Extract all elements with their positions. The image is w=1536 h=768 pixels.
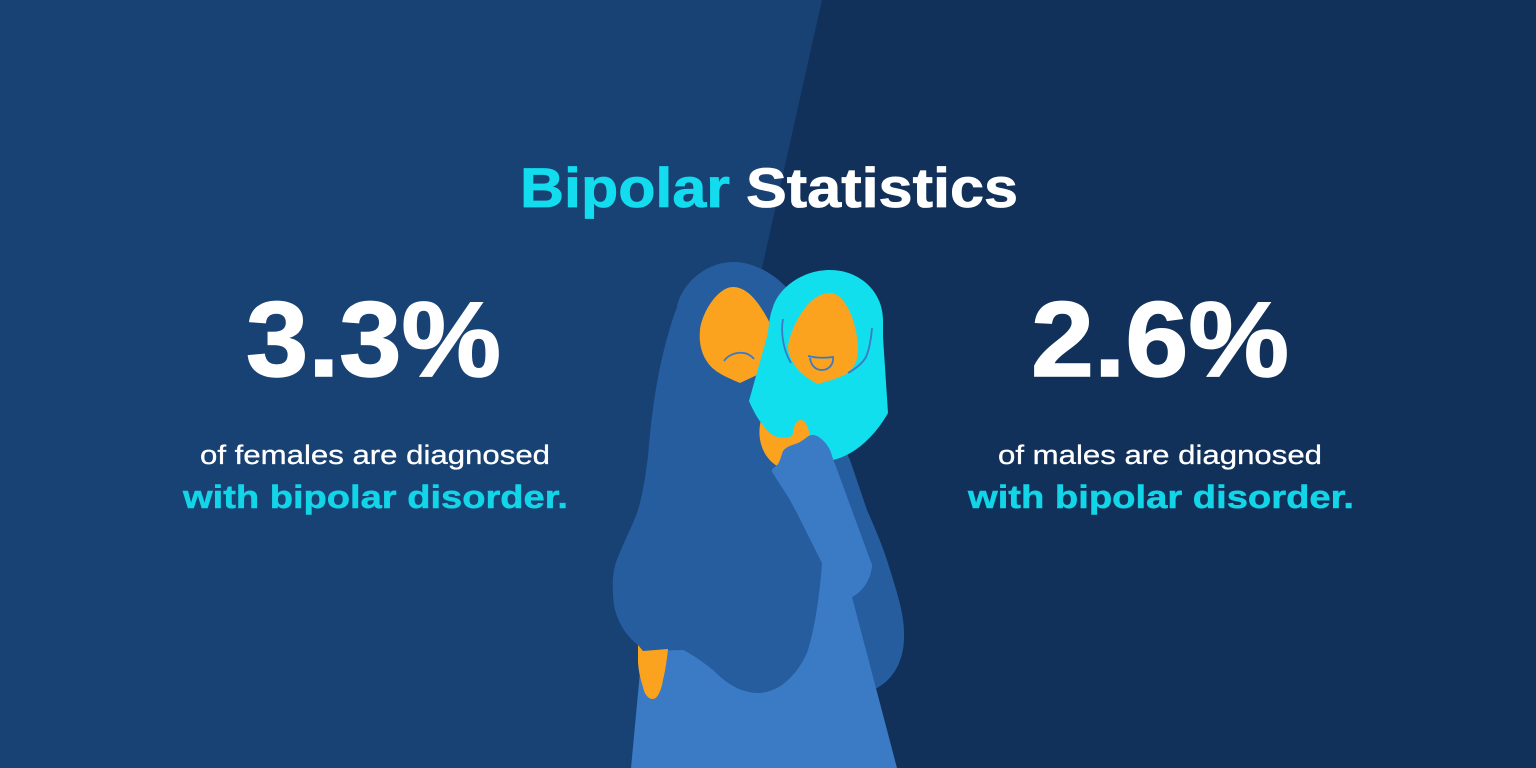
left hair strand xyxy=(782,319,791,363)
right statistic: males xyxy=(967,279,1354,515)
rear scarf xyxy=(700,262,904,690)
highlighted line: with bipolar disorder. xyxy=(182,479,568,515)
background: lighter left panel xyxy=(0,0,822,768)
title: Statistics xyxy=(746,156,1018,219)
dress body xyxy=(631,460,897,768)
left statistic: females xyxy=(182,279,568,515)
fingers xyxy=(777,420,810,450)
illustration: woman with two faces xyxy=(613,262,904,768)
arm xyxy=(772,435,872,597)
right hair strand xyxy=(848,328,872,373)
title xyxy=(520,156,1018,219)
big number 3.3%: 3.3% xyxy=(246,279,501,399)
frown xyxy=(724,353,754,361)
cyan scarf xyxy=(749,270,888,470)
happy face xyxy=(788,293,858,384)
lower hand xyxy=(759,420,800,466)
highlighted line: with bipolar disorder. xyxy=(967,479,1354,515)
title: Bipolar xyxy=(520,156,730,219)
description line: of females are diagnosed xyxy=(200,440,550,470)
hand at hem xyxy=(638,645,668,699)
front drape xyxy=(613,262,822,693)
smile xyxy=(808,356,833,370)
sad face xyxy=(700,287,771,383)
big number 2.6%: 2.6% xyxy=(1031,279,1289,399)
description line: of males are diagnosed xyxy=(998,440,1322,470)
